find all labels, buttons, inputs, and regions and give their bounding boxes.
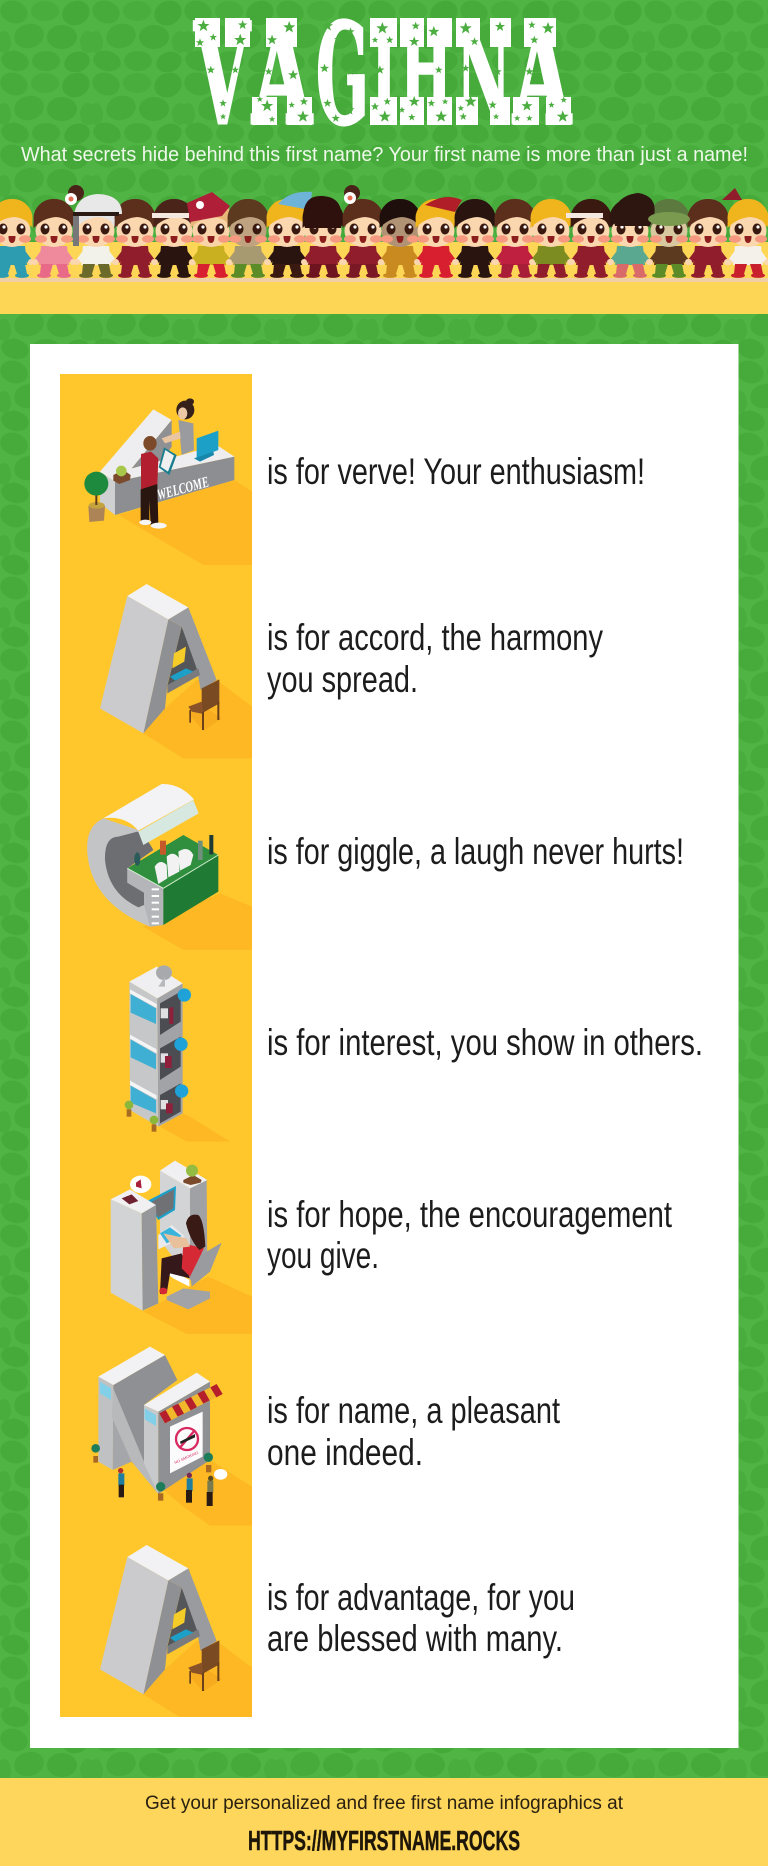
icon: V welcome desk: WELCOME (155, 474, 211, 504)
row of cartoon characters (0, 185, 768, 278)
title letters (193, 0, 572, 156)
icon: letter N with no-smoking sign: NO SMOKING (174, 1451, 199, 1465)
icon: letter G with green roof (87, 784, 252, 950)
text: final A line (267, 1577, 575, 1659)
text: H line (267, 1194, 673, 1276)
text: final A line: is for advantage, for you (267, 1577, 575, 1618)
text: H line: you give. (267, 1235, 379, 1276)
text: N line: is for name, a pleasant (267, 1390, 561, 1431)
title (193, 0, 572, 156)
icon: letter N with no-smoking sign (91, 1347, 252, 1526)
text: A line: is for accord, the harmony (267, 617, 603, 658)
text: A line: you spread. (267, 659, 418, 700)
yellow ground band (0, 242, 768, 314)
icon: letter A with chair (repeat) (100, 1545, 252, 1719)
headwear and flowers (65, 185, 742, 246)
text: H line: is for hope, the encouragement (267, 1194, 673, 1235)
icon: V welcome desk (84, 398, 252, 565)
text: V line: is for verve! Your enthusiasm! (267, 451, 645, 492)
text: N line (267, 1390, 561, 1473)
footer band (0, 1778, 768, 1866)
title serif blocks (195, 18, 571, 125)
icon: letter A with chair (100, 584, 252, 758)
text: final A line: are blessed with many. (267, 1618, 563, 1659)
title stars (196, 20, 569, 122)
footer link: HTTPS://MYFIRSTNAME.ROCKS (248, 1825, 520, 1856)
icon: letter H workstation (111, 1161, 252, 1334)
text: A line (267, 617, 603, 700)
icon: letter I office tower (125, 965, 230, 1142)
footer text: Get your personalized and free first name infographics at (145, 1793, 624, 1814)
panel: yellow illustration strip (60, 374, 252, 1717)
subtitle: What secrets hide behind this first name? Your first name is more than just a name! (21, 144, 748, 166)
panel: main white card (30, 344, 738, 1748)
text: N line: one indeed. (267, 1432, 423, 1473)
